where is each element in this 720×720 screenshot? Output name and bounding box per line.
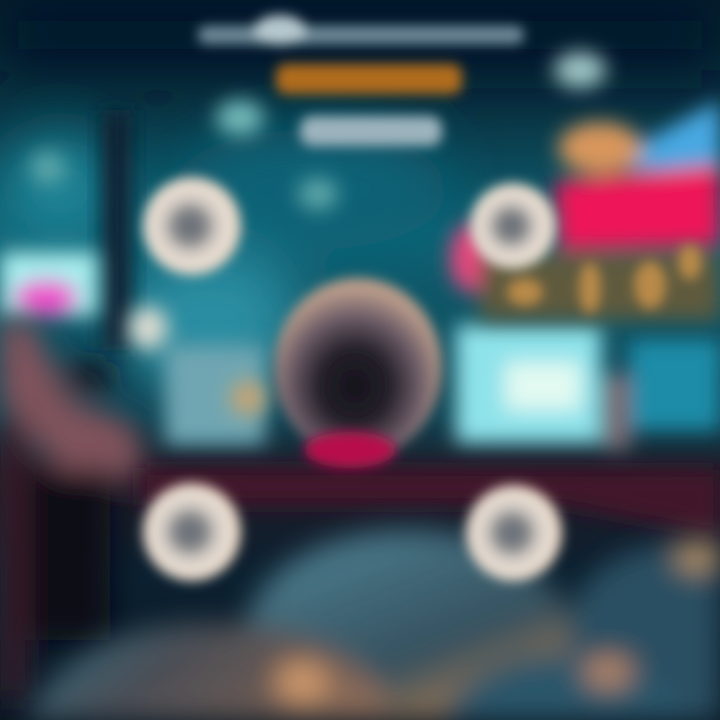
title: orange highlighted line: [276, 64, 462, 94]
dark vertical pole: [102, 110, 132, 350]
right stage: golden lights: [507, 244, 702, 314]
left crowd figure with raised arm: [0, 320, 145, 700]
icon: circle badge top left: [143, 177, 241, 275]
central speaker head: [274, 278, 442, 468]
right stage: colorful canopy: [450, 100, 720, 320]
maroon divider band: [140, 468, 720, 535]
icon: circle badge bottom right: [466, 485, 562, 581]
title: illegible heading line: [198, 15, 524, 45]
icon: circle badge top right: [470, 183, 556, 269]
central lower screens: [165, 325, 720, 450]
foreground audience heads: [25, 530, 720, 720]
left screen: [0, 252, 98, 316]
icon: circle badge bottom left: [143, 483, 241, 581]
floating small glow markers: [30, 52, 606, 416]
background: stage lighting glow: [0, 0, 720, 390]
title: third illegible line: [300, 116, 442, 146]
